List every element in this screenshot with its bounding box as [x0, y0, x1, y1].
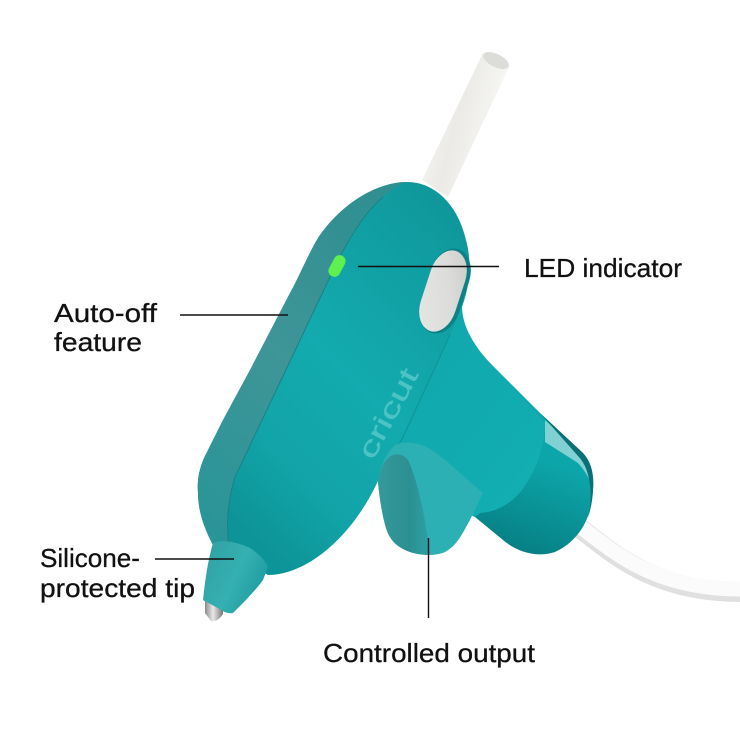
gloss strip [545, 420, 592, 486]
metal nozzle [205, 601, 223, 621]
leader line: auto-off [180, 314, 288, 316]
leader line: LED indicator [358, 266, 499, 268]
side panel [198, 182, 407, 548]
glue stick [422, 49, 511, 197]
LED light [326, 253, 348, 279]
label: Silicone-protected tip [40, 543, 195, 603]
label: Silicone-protected tip: protected tip [40, 573, 195, 603]
label: LED indicator: LED indicator [524, 253, 682, 283]
leader line: silicone tip [155, 558, 234, 560]
silicone tip [203, 541, 268, 621]
label: Silicone-protected tip: Silicone- [40, 543, 140, 573]
label: Controlled output: Controlled output [323, 638, 536, 668]
trigger [378, 442, 483, 555]
label: Auto-off feature [54, 298, 158, 357]
body seam [380, 335, 450, 478]
label: Auto-off feature: feature [54, 327, 142, 357]
power cable [578, 525, 740, 592]
leader line: controlled output [428, 538, 430, 618]
handle front grip [380, 300, 545, 517]
grip hole [412, 243, 478, 339]
gun body [198, 182, 478, 575]
cricut logo: cricut [352, 363, 425, 464]
label: Auto-off feature: Auto-off [54, 298, 158, 328]
handle [380, 300, 593, 554]
